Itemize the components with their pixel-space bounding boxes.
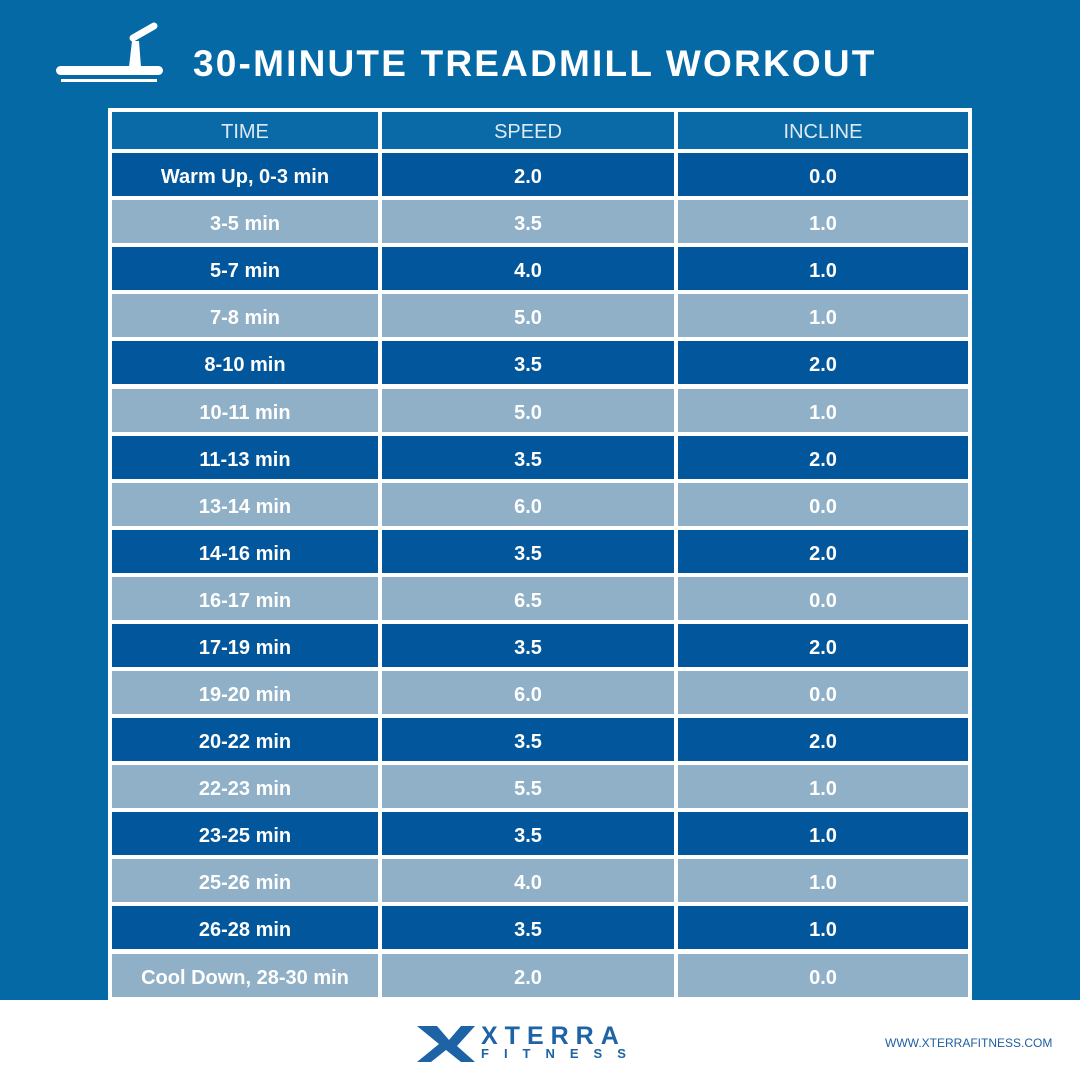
- table: 1.0: [809, 778, 837, 800]
- header row: TIME: [221, 121, 269, 143]
- table: 4.0: [514, 872, 542, 894]
- table: 5-7 min: [210, 260, 280, 282]
- table: 1.0: [809, 825, 837, 847]
- table: 3.5: [514, 213, 542, 235]
- table: 3.5: [514, 919, 542, 941]
- table: 3.5: [514, 637, 542, 659]
- table: 2.0: [809, 637, 837, 659]
- logo: xterra fitness: FITNESS: [481, 1046, 641, 1061]
- table: 1.0: [809, 260, 837, 282]
- table: 0.0: [809, 590, 837, 612]
- table: 0.0: [809, 496, 837, 518]
- table: Cool Down, 28-30 min: [141, 967, 349, 989]
- table: 2.0: [514, 166, 542, 188]
- table: 25-26 min: [199, 872, 291, 894]
- table: 6.0: [514, 684, 542, 706]
- table: 10-11 min: [199, 402, 291, 424]
- table: 2.0: [809, 731, 837, 753]
- table: 0.0: [809, 967, 837, 989]
- title: 30-MINUTE TREADMILL WORKOUT: [193, 43, 877, 84]
- table: 2.0: [809, 543, 837, 565]
- table: Warm Up, 0-3 min: [161, 166, 329, 188]
- table: 1.0: [809, 872, 837, 894]
- logo: xterra fitness: XTERRA: [481, 1022, 626, 1050]
- table: 11-13 min: [199, 449, 291, 471]
- table: 2.0: [809, 449, 837, 471]
- header row: INCLINE: [784, 121, 862, 143]
- table: 1.0: [809, 402, 837, 424]
- table: 3.5: [514, 825, 542, 847]
- table: 1.0: [809, 919, 837, 941]
- table: 4.0: [514, 260, 542, 282]
- table: 3-5 min: [210, 213, 280, 235]
- table: 22-23 min: [199, 778, 291, 800]
- table: 2.0: [514, 967, 542, 989]
- url: WWW.XTERRAFITNESS.COM: [885, 1036, 1052, 1050]
- table: 5.0: [514, 307, 542, 329]
- table: 3.5: [514, 354, 542, 376]
- table: 14-16 min: [199, 543, 291, 565]
- table: 5.5: [514, 778, 542, 800]
- table: 3.5: [514, 449, 542, 471]
- table: 16-17 min: [199, 590, 291, 612]
- table: 3.5: [514, 543, 542, 565]
- table: 5.0: [514, 402, 542, 424]
- icon: treadmill: [56, 22, 163, 82]
- logo: xterra fitness: [417, 1022, 641, 1062]
- table: [108, 108, 972, 1000]
- table: 6.5: [514, 590, 542, 612]
- table: 0.0: [809, 166, 837, 188]
- table: 8-10 min: [204, 354, 286, 376]
- table: 17-19 min: [199, 637, 291, 659]
- table: 19-20 min: [199, 684, 291, 706]
- table: 20-22 min: [199, 731, 291, 753]
- table: 2.0: [809, 354, 837, 376]
- table: 13-14 min: [199, 496, 291, 518]
- table: 3.5: [514, 731, 542, 753]
- table: 7-8 min: [210, 307, 280, 329]
- table: 6.0: [514, 496, 542, 518]
- table: 0.0: [809, 684, 837, 706]
- table: 23-25 min: [199, 825, 291, 847]
- table: 1.0: [809, 213, 837, 235]
- table: 1.0: [809, 307, 837, 329]
- table: 26-28 min: [199, 919, 291, 941]
- header row: SPEED: [494, 121, 562, 143]
- header row: [112, 112, 968, 149]
